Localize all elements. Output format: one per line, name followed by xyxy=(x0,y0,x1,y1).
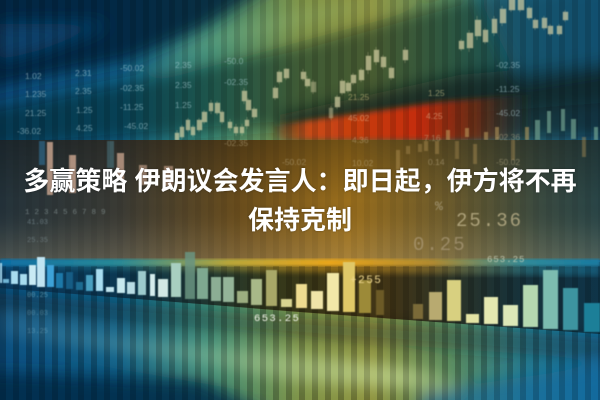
bar chart: lower xyxy=(0,252,600,332)
title: 保持克制 xyxy=(248,205,352,235)
data numbers: lower: +255 xyxy=(350,275,382,287)
data numbers: upper: 2.35 xyxy=(75,86,92,96)
background: financial chart image: 0.14 xyxy=(428,157,445,167)
red glow band xyxy=(270,88,600,140)
data numbers: lower: 123456789 xyxy=(25,209,111,217)
data numbers: upper: 4.25 xyxy=(76,123,93,133)
data numbers: lower: 00.03 xyxy=(27,310,48,318)
data numbers: lower: % xyxy=(435,199,443,214)
data numbers: upper: 2.35 xyxy=(175,80,192,90)
data numbers: upper: 1.25 xyxy=(76,105,93,115)
dark sloping panel behind lower bars xyxy=(0,262,600,334)
background: financial chart image: -50.02 xyxy=(282,157,306,167)
background: financial chart image: 7.16 xyxy=(424,133,441,143)
data numbers: upper: 1.25 xyxy=(175,100,192,110)
data numbers: lower: 0.25 xyxy=(413,234,467,256)
data numbers: lower xyxy=(25,199,525,336)
dark area under bright diagonal xyxy=(0,0,600,150)
data numbers: upper: -02.35 xyxy=(496,60,520,70)
data numbers: lower: 13.25 xyxy=(27,328,48,336)
lower tint below slope xyxy=(0,292,600,400)
background: financial chart image: -02.36 xyxy=(496,132,520,142)
candlesticks: upper light xyxy=(175,0,568,142)
background: financial chart image: 4.36 xyxy=(352,135,369,145)
data numbers: lower: 653.25 xyxy=(254,313,300,325)
data numbers: upper: 4.25 xyxy=(426,111,443,121)
data numbers: upper: 1.235 xyxy=(25,89,47,99)
title: 多赢策略 伊朗议会发言人：即日起，伊方将不再 xyxy=(23,166,577,196)
title xyxy=(23,166,577,235)
data numbers: upper: -11.25 xyxy=(496,84,520,94)
data numbers: upper: 45.02 xyxy=(348,113,370,123)
background: financial chart image: -02.35 xyxy=(224,138,248,148)
data numbers: upper: 21.25 xyxy=(25,108,47,118)
data numbers: lower: 25.35 xyxy=(27,237,48,245)
data numbers: lower: 653.25 xyxy=(487,255,525,265)
data numbers: upper: 2.31 xyxy=(75,68,92,78)
dark top-left wedge xyxy=(0,0,280,90)
data numbers: lower: 41.03 xyxy=(27,219,48,227)
data numbers: upper: -36.02 xyxy=(17,126,41,136)
data numbers: upper: 2.35 xyxy=(175,60,192,70)
data numbers: upper: 1.25 xyxy=(428,88,445,98)
data numbers: upper: -50.02 xyxy=(120,63,144,73)
data numbers: upper: -45.02 xyxy=(124,121,148,131)
background: financial chart image: -50.02 xyxy=(496,157,520,167)
bright strip below band xyxy=(0,259,600,266)
data numbers: upper: -02.35 xyxy=(224,77,248,87)
data numbers: lower: 25.36 xyxy=(456,210,523,232)
data numbers: lower: 00.25 xyxy=(27,292,48,300)
data numbers: upper: -50.0 xyxy=(224,56,244,66)
background: financial chart image: 10.02 xyxy=(352,158,374,168)
data numbers: upper: 1.02 xyxy=(25,71,42,81)
data numbers: upper: -02.35 xyxy=(120,83,144,93)
data numbers: upper: -45.02 xyxy=(496,108,520,118)
data numbers: upper xyxy=(17,56,520,136)
data numbers: upper: 21.25 xyxy=(348,92,370,102)
translucent dark title band xyxy=(0,140,600,260)
faint chart marks in band xyxy=(39,137,586,195)
data numbers: upper: -11.25 xyxy=(120,102,144,112)
candlesticks: lower dim xyxy=(446,109,598,140)
